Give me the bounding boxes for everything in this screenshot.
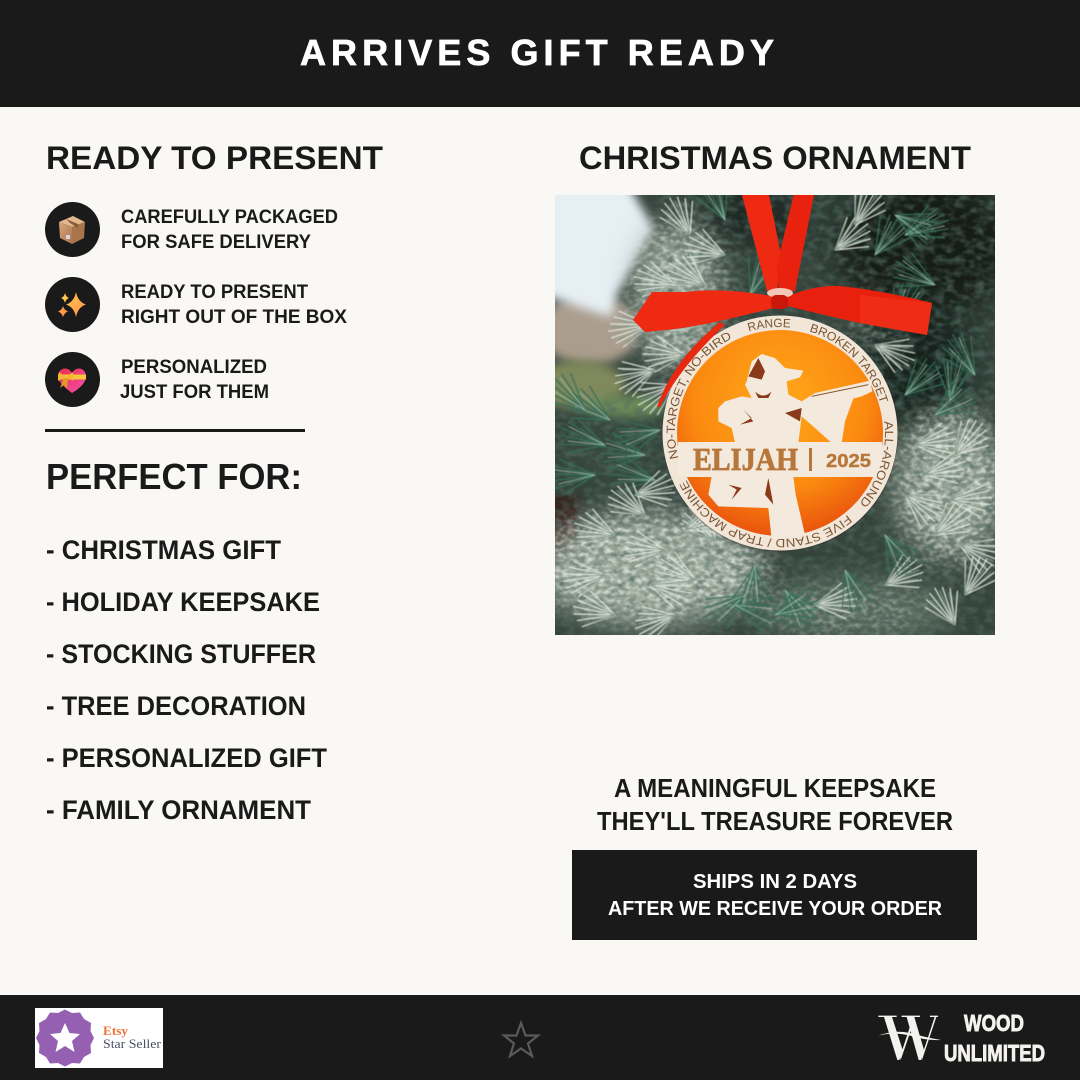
ribbon: bow (633, 286, 932, 407)
ornament: ALL-AROUND (861, 421, 894, 506)
list: occasions: - PERSONALIZED GIFT (46, 743, 327, 773)
list: occasions: - TREE DECORATION (46, 691, 306, 721)
header bar (0, 0, 1080, 107)
name engraving (693, 448, 871, 471)
text: carefully packaged: CAREFULLY PACKAGED (121, 206, 338, 228)
text: ready to present (121, 281, 347, 328)
icon: outline star (504, 1023, 538, 1056)
title: ARRIVES GIFT READY (300, 32, 774, 73)
text: carefully packaged (121, 206, 338, 253)
callout: shipping: SHIPS IN 2 DAYS (693, 871, 857, 893)
text: personalized: JUST FOR THEM (120, 381, 269, 403)
text: personalized: PERSONALIZED (121, 356, 267, 378)
text: personalized (120, 356, 269, 403)
ring text (675, 327, 885, 539)
shooter silhouette (708, 354, 872, 540)
panel: ready to present (45, 140, 383, 407)
list: occasions (46, 535, 327, 825)
tagline: A MEANINGFUL KEEPSAKE (614, 775, 936, 803)
heading: perfect for: PERFECT FOR: (46, 456, 302, 497)
ornament: FIVE STAND / TRAP MACHINE (680, 480, 852, 548)
icon: gift heart (45, 352, 100, 407)
list: occasions: - HOLIDAY KEEPSAKE (46, 587, 320, 617)
ornament (662, 316, 898, 552)
logo: wood unlimited (878, 1010, 1045, 1066)
ornament: NO-TARGET, NO-BIRD (666, 332, 730, 459)
heading: christmas ornament: CHRISTMAS ORNAMENT (579, 140, 971, 176)
panel: perfect for (46, 456, 327, 825)
icon: package (45, 202, 100, 257)
heading: ready to present: READY TO PRESENT (46, 140, 383, 176)
text: ready to present: READY TO PRESENT (121, 281, 308, 303)
pine needles (555, 195, 995, 635)
callout: shipping: AFTER WE RECEIVE YOUR ORDER (608, 898, 943, 920)
icon: sparkles (45, 277, 100, 332)
photo: ornament on pine tree (555, 195, 995, 635)
list: occasions: - FAMILY ORNAMENT (46, 795, 311, 825)
logo mark (878, 1016, 941, 1060)
ornament: RANGE (748, 318, 790, 332)
badge: etsy star seller: Etsy (103, 1023, 129, 1038)
footer bar (0, 995, 1080, 1080)
logo: wood unlimited: WOOD (964, 1010, 1024, 1036)
text: carefully packaged: FOR SAFE DELIVERY (121, 231, 311, 253)
ribbon: hanging loop (742, 193, 814, 293)
needle texture (555, 195, 995, 635)
text: ready to present: RIGHT OUT OF THE BOX (121, 306, 347, 328)
logo: wood unlimited: UNLIMITED (944, 1040, 1045, 1066)
tagline: THEY'LL TREASURE FOREVER (597, 808, 953, 836)
name band (678, 442, 882, 477)
list: occasions: - CHRISTMAS GIFT (46, 535, 281, 565)
list: occasions: - STOCKING STUFFER (46, 639, 316, 669)
tagline (597, 775, 953, 836)
ornament: BROKEN TARGET (810, 324, 888, 401)
badge: etsy star seller: Star Seller (103, 1036, 162, 1051)
name engraving: ELIJAH (693, 441, 798, 477)
callout: shipping (572, 850, 977, 940)
name engraving: 2025 (826, 451, 871, 471)
badge: etsy star seller (35, 1008, 163, 1068)
blurred background (555, 195, 995, 635)
